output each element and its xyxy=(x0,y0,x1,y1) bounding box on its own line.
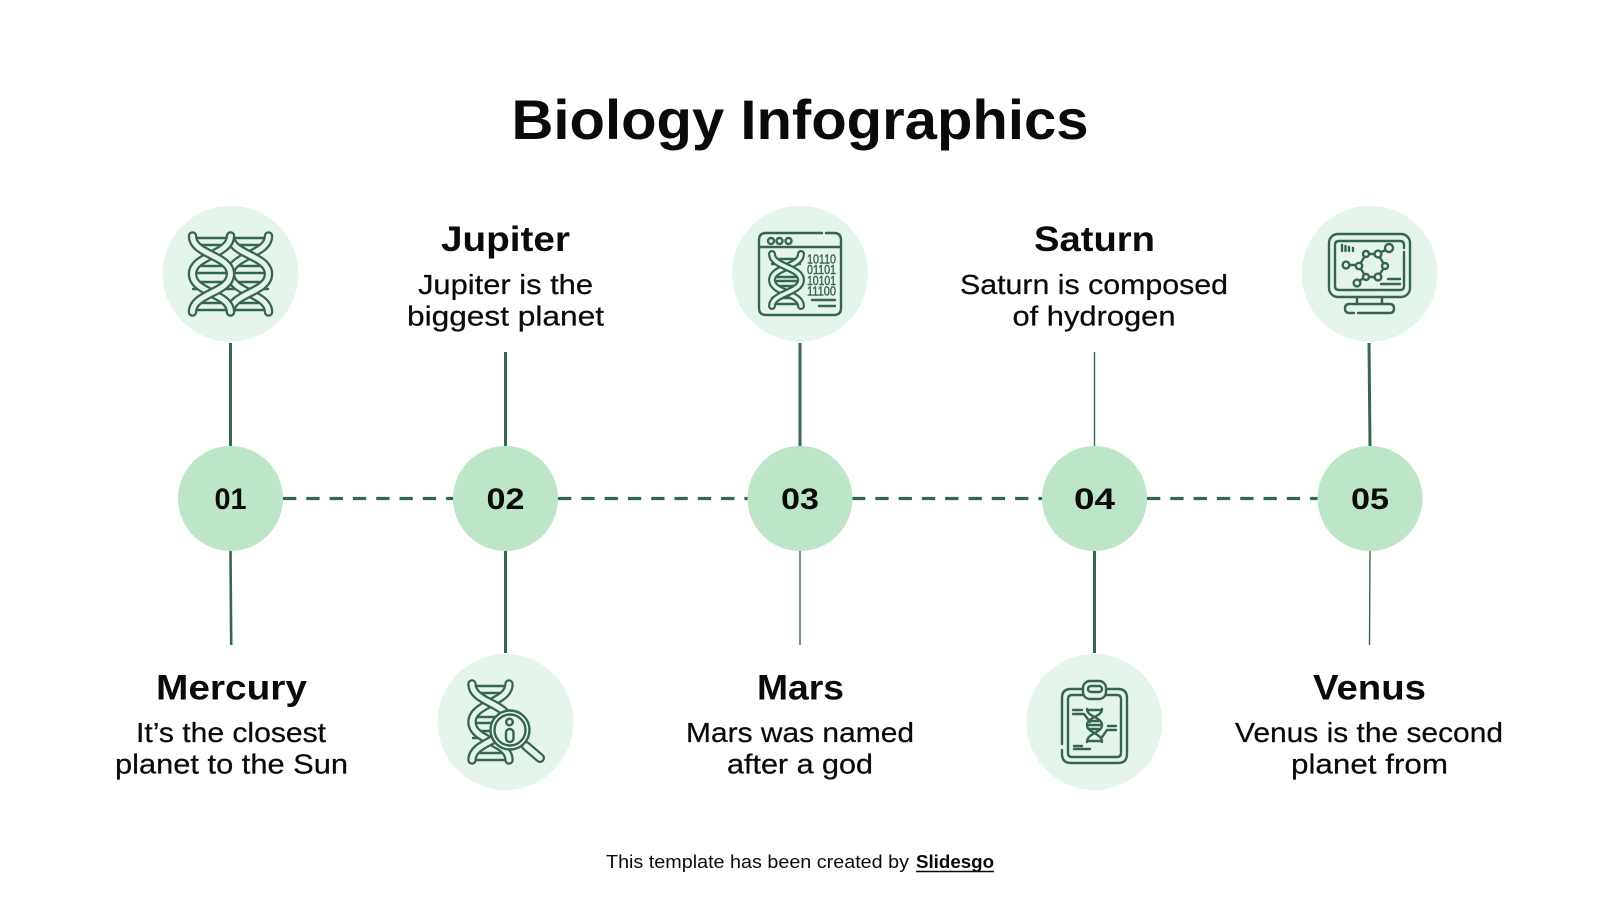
icon: double DNA helix xyxy=(162,206,298,342)
step 04: Saturn xyxy=(960,220,1228,790)
connector top xyxy=(798,343,802,446)
number badge 03: 03 xyxy=(781,483,819,516)
step 02: Jupiter xyxy=(407,220,604,790)
label: Mars: Mars xyxy=(757,668,844,708)
label: Venus xyxy=(1235,668,1503,780)
title: Biology Infographics xyxy=(512,88,1088,151)
number badge 02: 02 xyxy=(486,483,524,516)
connector top xyxy=(229,343,232,446)
number badge 04: 04 xyxy=(1074,483,1115,516)
icon: clipboard with DNA xyxy=(1026,654,1162,790)
icon: browser window with DNA and binary: 10101 xyxy=(807,274,836,288)
connector top xyxy=(1094,352,1096,446)
step 03: Mars xyxy=(686,206,914,780)
icon: monitor with molecule xyxy=(1302,206,1438,342)
label: Mercury xyxy=(115,668,348,780)
number badge 04 xyxy=(1042,446,1147,551)
label: Venus: Venus is the second xyxy=(1235,717,1503,748)
connector bottom xyxy=(799,551,801,645)
step 01: Mercury xyxy=(115,206,348,780)
label: Jupiter: Jupiter xyxy=(441,220,570,259)
icon: DNA with magnifier info xyxy=(438,654,574,790)
label: Saturn xyxy=(960,220,1228,332)
number badge 01: 01 xyxy=(214,483,246,516)
label: Mars: Mars was named xyxy=(686,717,914,748)
connector bottom xyxy=(1368,551,1371,645)
label: Mercury: Mercury xyxy=(156,668,308,708)
label: Jupiter: biggest planet xyxy=(407,300,604,332)
connector bottom xyxy=(1093,551,1096,653)
dashed timeline connector xyxy=(283,497,1318,500)
connector bottom xyxy=(229,551,232,645)
label: Saturn: of hydrogen xyxy=(1012,300,1176,332)
step 05: Venus xyxy=(1235,206,1503,780)
label: Jupiter xyxy=(407,220,604,332)
number badge 02 xyxy=(453,446,558,551)
label: Saturn: Saturn xyxy=(1034,220,1155,259)
label: Venus: planet from xyxy=(1291,748,1448,780)
label: Mars: after a god xyxy=(727,748,873,780)
footer credit: This template has been created by xyxy=(606,852,909,872)
number badge 05: 05 xyxy=(1351,483,1389,516)
footer credit: Slidesgo xyxy=(916,852,994,872)
icon: browser window with DNA and binary: 11100 xyxy=(807,284,836,298)
label: Saturn: Saturn is composed xyxy=(960,269,1228,300)
icon: browser window with DNA and binary xyxy=(732,206,868,342)
label: Mercury: It’s the closest xyxy=(136,717,326,748)
label: Venus: Venus xyxy=(1313,668,1426,708)
number badge 05 xyxy=(1318,446,1422,551)
label: Jupiter: Jupiter is the xyxy=(418,269,593,300)
icon: browser window with DNA and binary: 01101 xyxy=(807,263,836,277)
connector bottom xyxy=(504,551,507,653)
label: Mercury: planet to the Sun xyxy=(115,748,348,780)
connector top xyxy=(504,352,507,446)
connector top xyxy=(1369,343,1370,446)
icon: browser window with DNA and binary: 10110 xyxy=(807,252,836,266)
label: Mars xyxy=(686,668,914,780)
number badge 01 xyxy=(178,446,283,551)
number badge 03 xyxy=(748,446,852,551)
